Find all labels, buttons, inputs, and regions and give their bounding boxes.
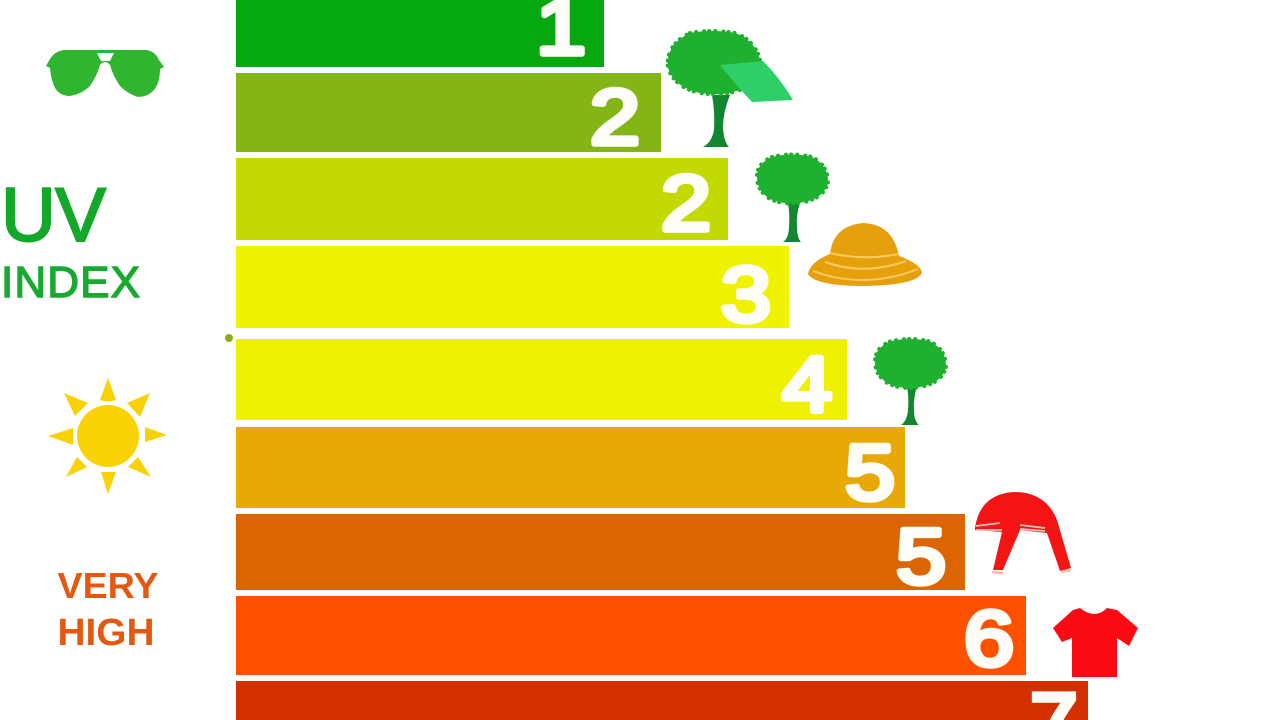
bar 4: yellow, value 3: 3 [721,250,771,338]
bar 3: lime, value 2 [236,158,728,247]
icon: tree [757,154,828,242]
bar 8: orange-red, value 6 [236,594,1026,682]
icon: red t-shirt [1053,608,1138,677]
icon: tree with shade sail [668,31,793,147]
bar 1: green, value 1 [236,0,604,71]
icon: red long-sleeve jacket [975,492,1071,573]
bar 7: dark orange, value 5: 5 [896,512,946,600]
title: INDEX: INDEX [1,258,140,307]
bar 7: dark orange, value 5 [236,512,965,600]
bar 8: orange-red, value 6: 6 [964,594,1014,682]
bar 6: amber, value 5: 5 [845,428,895,516]
label: HIGH: HIGH [58,612,154,654]
bar 4: yellow, value 3 [236,246,789,338]
bar 9: red, value 7 [236,681,1088,720]
icon: sun [48,378,167,494]
dot marker [225,334,233,342]
bar 5: yellow, value 4: 4 [782,340,832,428]
icon: small tree [875,339,946,425]
icon: wide-brim hat [808,223,922,286]
bar 6: amber, value 5 [236,427,905,516]
icon: sunglasses [46,50,164,97]
bar 3: lime, value 2: 2 [661,159,711,247]
bar 2: olive green, value 2: 2 [590,73,640,161]
bar 5: yellow, value 4 [236,339,847,428]
bar 2: olive green, value 2 [236,73,661,161]
title: UV: UV [1,173,106,258]
label: VERY: VERY [58,565,158,606]
